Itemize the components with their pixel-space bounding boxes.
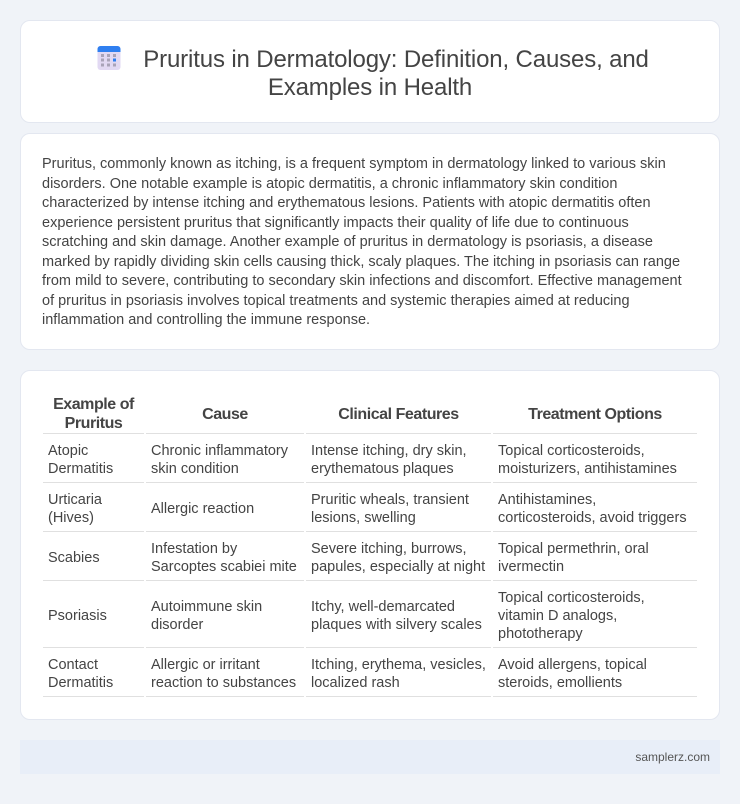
table: plaques with silvery scales: [311, 617, 482, 633]
panel: description text: of pruritus in psoriasis involves topical treatments and systemic therapies aimed at reducing: [42, 292, 630, 308]
table: steroids, emollients: [498, 675, 622, 691]
table: Allergic or irritant: [151, 657, 260, 673]
table: Urticaria: [48, 492, 102, 508]
table: Topical permethrin, oral: [498, 541, 649, 557]
table: Dermatitis: [48, 675, 113, 691]
icon: calendar: [98, 46, 120, 70]
table: Infestation by: [151, 541, 237, 557]
table: Severe itching, burrows,: [311, 541, 467, 557]
title: Pruritus in Dermatology: Definition, Causes, and: [143, 46, 649, 72]
panel: header: [20, 20, 720, 123]
table: Allergic reaction: [151, 501, 254, 517]
table: Scabies: [48, 550, 100, 566]
table: erythematous plaques: [311, 461, 454, 477]
table: Sarcoptes scabiei mite: [151, 559, 297, 575]
panel: description text: characterized by intense itching and erythematous lesions. Patients with atopic dermatitis often: [42, 195, 651, 211]
table: corticosteroids, avoid triggers: [498, 510, 687, 526]
panel: description text: inflammation and controlling the immune response.: [42, 312, 370, 328]
table: Treatment Options: [528, 406, 662, 422]
table: Avoid allergens, topical: [498, 657, 647, 673]
table: skin condition: [151, 461, 239, 477]
table: vitamin D analogs,: [498, 608, 617, 624]
footer text: samplerz.com: [635, 750, 710, 764]
table: Topical corticosteroids,: [498, 590, 645, 606]
table: localized rash: [311, 675, 400, 691]
table: Autoimmune skin: [151, 599, 262, 615]
table: Pruritus: [65, 415, 122, 432]
table: Intense itching, dry skin,: [311, 443, 467, 459]
table: ivermectin: [498, 559, 564, 575]
table: Example of: [53, 396, 134, 413]
table: Chronic inflammatory: [151, 443, 288, 459]
table: Cause: [202, 406, 248, 422]
title: [143, 46, 649, 101]
table: reaction to substances: [151, 675, 296, 691]
panel: description text: Pruritus, commonly known as itching, is a frequent symptom in dermatology linked to various skin: [42, 156, 666, 172]
table: Atopic: [48, 443, 88, 459]
panel: examples table: [20, 370, 720, 720]
table: Itchy, well-demarcated: [311, 599, 455, 615]
panel: description text: experience persistent pruritus that significantly impacts their quality of life due to continuous: [42, 214, 629, 230]
table: Clinical Features: [338, 406, 459, 422]
table: (Hives): [48, 510, 94, 526]
table: Contact: [48, 657, 98, 673]
title: Examples in Health: [268, 74, 472, 101]
panel: description text: [20, 133, 720, 350]
panel: description text: from mild to severe, contributing to secondary skin infections and discomfort. Effective management: [42, 273, 682, 289]
table: Psoriasis: [48, 608, 107, 624]
table: Pruritic wheals, transient: [311, 492, 469, 508]
table: phototherapy: [498, 626, 583, 642]
panel: description text: marked by rapidly dividing skin cells causing thick, scaly plaques. The itching in psoriasis can range: [42, 254, 680, 270]
table: disorder: [151, 617, 203, 633]
panel: description text: scratching and skin damage. Another example of pruritus in dermatology is psoriasis, a disease: [42, 234, 653, 250]
table: lesions, swelling: [311, 510, 416, 526]
table: moisturizers, antihistamines: [498, 461, 677, 477]
table: Dermatitis: [48, 461, 113, 477]
panel: description text: disorders. One notable example is atopic dermatitis, a chronic inflammatory skin condition: [42, 176, 617, 192]
table: Antihistamines,: [498, 492, 596, 508]
table: papules, especially at night: [311, 559, 485, 575]
table: [43, 396, 697, 697]
table: Itching, erythema, vesicles,: [311, 657, 486, 673]
table: Topical corticosteroids,: [498, 443, 645, 459]
footer bar: [20, 740, 720, 774]
